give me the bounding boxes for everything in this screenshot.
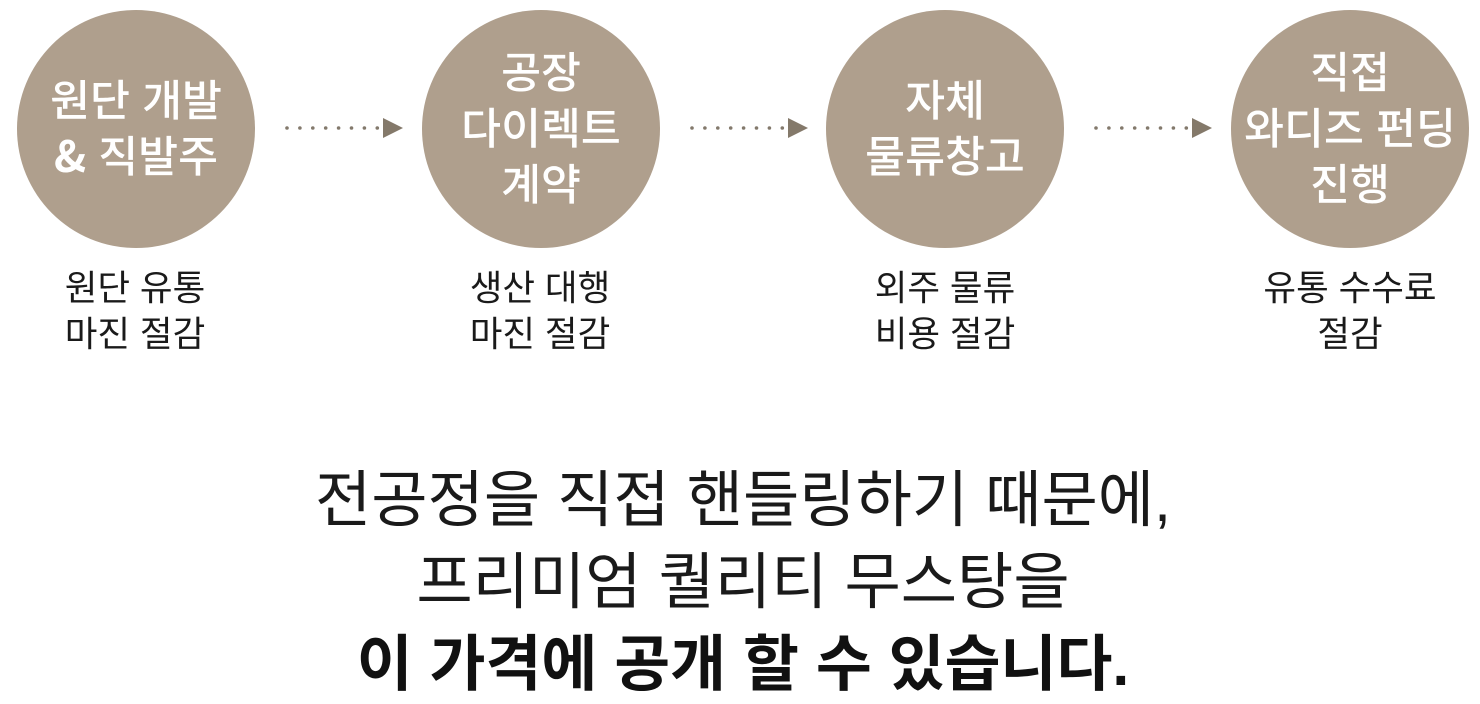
step 4 circle: Wadiz funding: 직접: [1310, 39, 1390, 101]
step 2 caption: 생산 대행: [470, 268, 610, 308]
step 3 caption: 외주 물류: [875, 268, 1015, 308]
step 4 caption: 절감: [1317, 314, 1383, 354]
step 4 circle: Wadiz funding: [1231, 10, 1469, 248]
arrow 2: [690, 118, 808, 138]
step 2 circle: factory direct contract: 다이렉트: [461, 95, 621, 157]
step 1 circle: fabric development: [17, 10, 255, 248]
statement line 1: 전공정을 직접 핸들링하기 때문에,: [315, 466, 1171, 534]
step 1 caption: 원단 유통: [65, 268, 205, 308]
step 3 circle: own logistics warehouse: 자체: [905, 67, 985, 129]
step 3 circle: own logistics warehouse: [826, 10, 1064, 248]
step 4 caption: 유통 수수료: [1263, 268, 1437, 308]
step 3 caption: [875, 268, 1015, 354]
closing statement: [315, 466, 1171, 698]
step 1 circle: fabric development: 원단 개발: [50, 67, 222, 129]
step 1 circle: fabric development: & 직발주: [54, 123, 218, 185]
step 3 caption: 비용 절감: [875, 314, 1015, 354]
step 4 circle: Wadiz funding: 진행: [1310, 151, 1390, 213]
statement line 3 (bold): 이 가격에 공개 할 수 있습니다.: [357, 630, 1129, 698]
step 4 caption: [1263, 268, 1437, 354]
step 2 caption: [470, 268, 610, 354]
arrow 3: [1094, 118, 1212, 138]
step 3 circle: own logistics warehouse: 물류창고: [865, 123, 1025, 185]
step 2 circle: factory direct contract: 계약: [501, 151, 581, 213]
step 2 caption: 마진 절감: [470, 314, 610, 354]
arrow 1: [285, 118, 403, 138]
step 1 caption: [65, 268, 205, 354]
step 2 circle: factory direct contract: [422, 10, 660, 248]
step 1 caption: 마진 절감: [65, 314, 205, 354]
step 4 circle: Wadiz funding: 와디즈 펀딩: [1244, 95, 1456, 157]
statement line 2: 프리미엄 퀄리티 무스탕을: [416, 548, 1070, 616]
step 2 circle: factory direct contract: 공장: [501, 39, 581, 101]
